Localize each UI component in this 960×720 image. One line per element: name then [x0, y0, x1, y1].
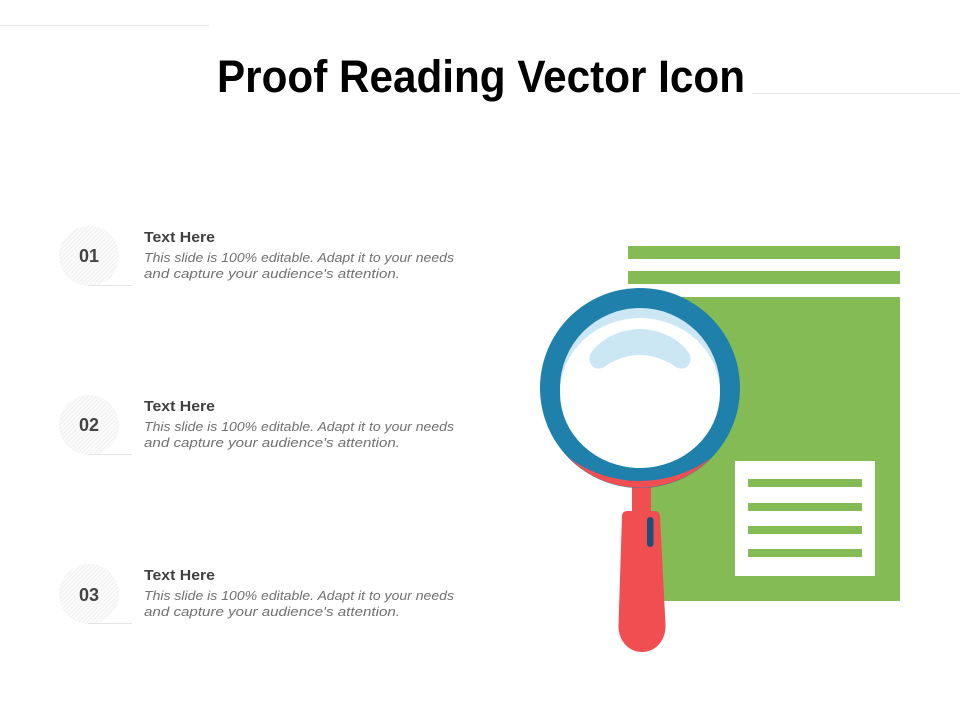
- item body 01: and capture your audience's attention.: [144, 266, 400, 281]
- number badge 02: 02: [79, 415, 99, 435]
- item heading 03: Text Here: [144, 567, 215, 584]
- number badge 01: [59, 226, 132, 286]
- item body 01: [144, 250, 455, 281]
- item body 01: This slide is 100% editable. Adapt it to your needs: [144, 250, 455, 265]
- number badge 03: 03: [79, 585, 99, 605]
- icon: magnifying glass: [540, 288, 740, 652]
- number badge 02: [59, 395, 132, 455]
- item heading 02: Text Here: [144, 398, 215, 415]
- item body 02: This slide is 100% editable. Adapt it to your needs: [144, 419, 455, 434]
- item heading 01: Text Here: [144, 229, 215, 246]
- item body 02: [144, 419, 455, 450]
- icon: green document: [628, 246, 900, 601]
- white note card: [735, 461, 875, 576]
- item body 03: This slide is 100% editable. Adapt it to your needs: [144, 588, 455, 603]
- item body 03: [144, 588, 455, 619]
- magnifier rim: [540, 288, 740, 488]
- list item 03: [59, 564, 455, 624]
- item body 02: and capture your audience's attention.: [144, 435, 400, 450]
- magnifier lens: [560, 308, 720, 468]
- list item 01: [59, 226, 455, 286]
- magnifier red collar: [569, 458, 711, 488]
- number badge 03: [59, 564, 132, 624]
- item body 03: and capture your audience's attention.: [144, 604, 400, 619]
- list item 02: [59, 395, 455, 455]
- title: Proof Reading Vector Icon: [217, 51, 745, 102]
- magnifier handle: [618, 484, 666, 652]
- number badge 01: 01: [79, 246, 99, 266]
